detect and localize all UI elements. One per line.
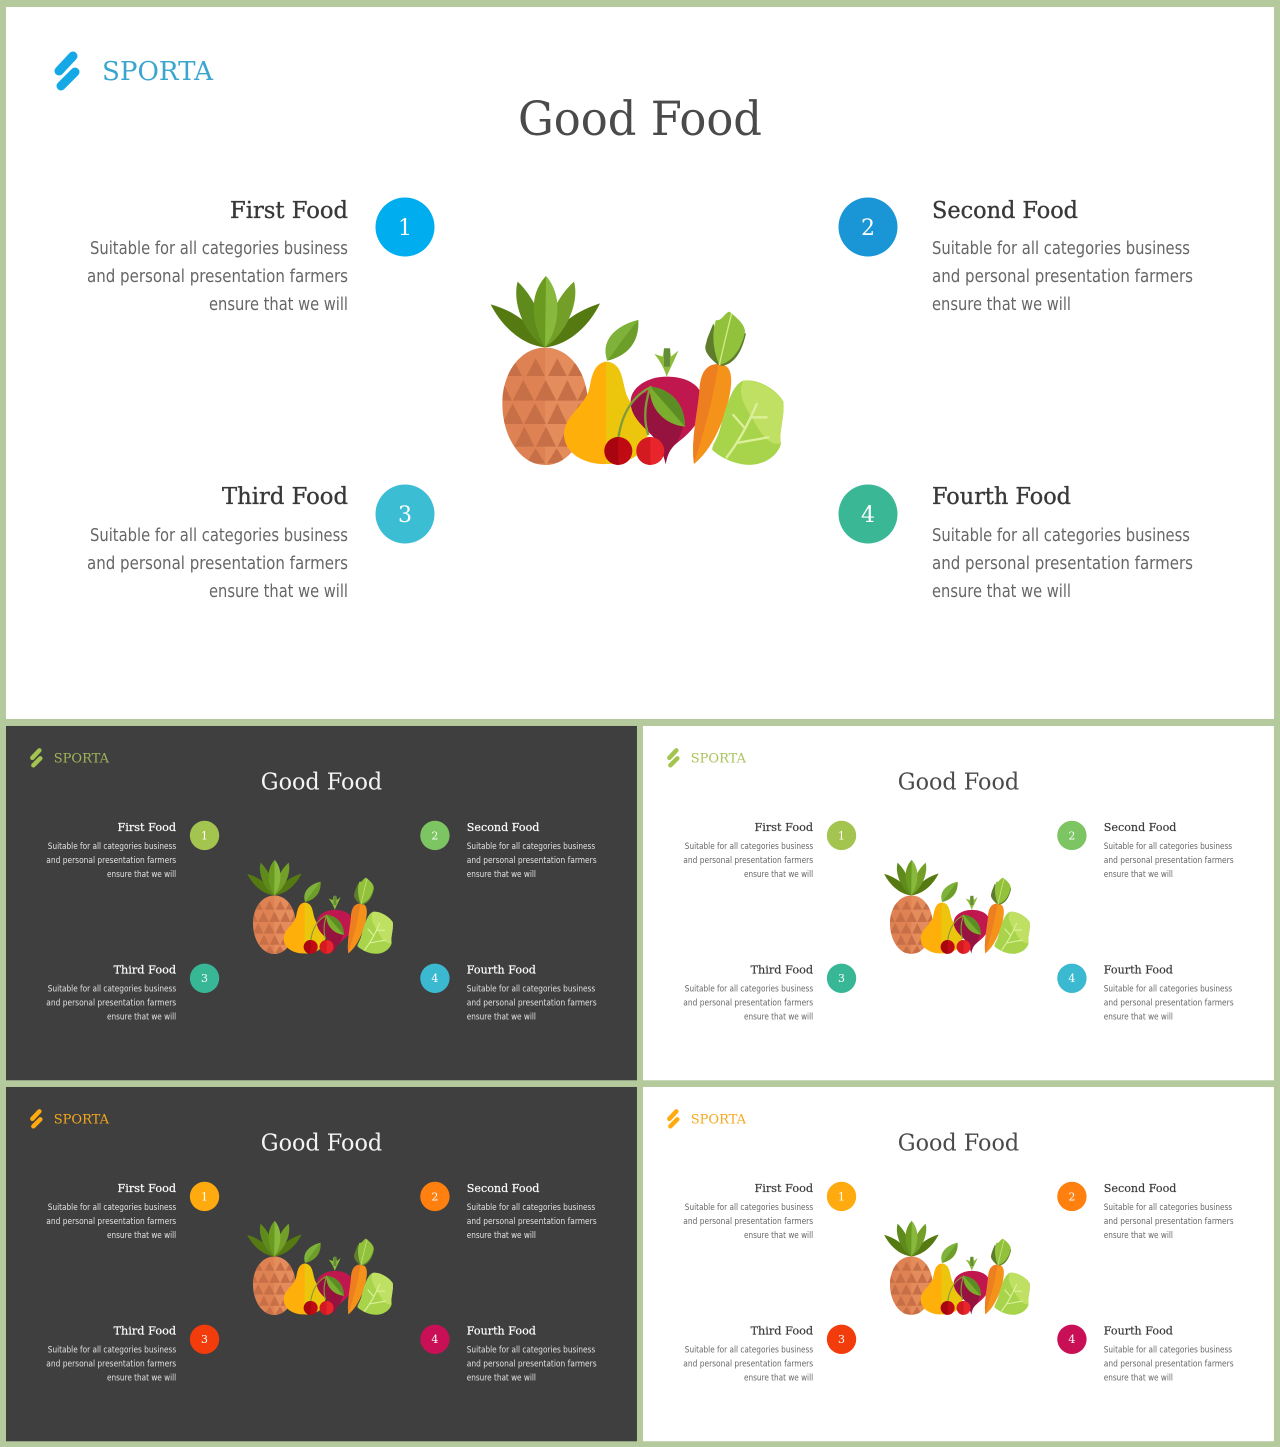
panel: dark slide, orange theme	[6, 1087, 637, 1441]
badge 2: 2	[861, 216, 875, 241]
logo: SPORTA	[669, 750, 747, 766]
text block: Second Food: and personal presentation farmers	[467, 1217, 597, 1227]
title: Good Food	[518, 92, 762, 147]
text block: Third Food: and personal presentation farmers	[46, 999, 177, 1009]
text block: Fourth Food: Fourth Food	[1104, 1323, 1173, 1337]
badge 2	[420, 821, 450, 850]
text block: Fourth Food	[932, 484, 1193, 602]
text block: Fourth Food	[1104, 962, 1234, 1023]
text block: First Food: and personal presentation farmers	[46, 1217, 177, 1227]
text block: Fourth Food: and personal presentation farmers	[932, 554, 1193, 574]
text block: Third Food: ensure that we will	[744, 1013, 813, 1023]
logo: SPORTA	[32, 750, 110, 766]
text block: Fourth Food: and personal presentation farmers	[1104, 999, 1234, 1009]
badge 1	[827, 1182, 856, 1211]
badge 4: 4	[861, 503, 875, 528]
text block: First Food	[87, 198, 348, 315]
text block: First Food: and personal presentation farmers	[683, 1217, 814, 1227]
logo: SPORTA	[669, 1111, 747, 1127]
text block: Second Food: Suitable for all categories business	[467, 842, 596, 852]
badge 3	[190, 1325, 219, 1354]
badge 1	[190, 1182, 219, 1211]
text block: Fourth Food	[1104, 1323, 1234, 1384]
logo: SPORTA	[32, 1111, 110, 1127]
text block: First Food: ensure that we will	[107, 870, 176, 880]
text block: Second Food: Second Food	[932, 198, 1078, 224]
badge 1	[376, 198, 434, 256]
text block: Fourth Food: ensure that we will	[467, 1374, 536, 1384]
text block: Fourth Food: ensure that we will	[1104, 1374, 1173, 1384]
text block: Third Food: ensure that we will	[107, 1013, 176, 1023]
badge 2	[420, 1182, 450, 1211]
text block: Fourth Food: Suitable for all categories business	[467, 985, 596, 995]
text block: Second Food	[467, 820, 597, 880]
badge 4	[838, 484, 898, 544]
text block: Fourth Food: Fourth Food	[467, 1323, 536, 1337]
text block: First Food	[683, 1181, 814, 1241]
badge 1	[190, 821, 219, 850]
text block: Second Food: Second Food	[467, 1181, 539, 1195]
text block: Fourth Food: Suitable for all categories business	[932, 526, 1190, 546]
badge 1: 1	[398, 216, 412, 241]
text block: Second Food	[1104, 820, 1234, 880]
text block: Third Food: Suitable for all categories business	[685, 985, 814, 995]
text block: First Food: and personal presentation farmers	[87, 267, 348, 287]
badge 2: 2	[1068, 1190, 1075, 1203]
text block: Fourth Food: ensure that we will	[467, 1013, 536, 1023]
text block: Fourth Food	[467, 1323, 597, 1384]
text block: Fourth Food: and personal presentation farmers	[467, 999, 597, 1009]
text block: Third Food: Suitable for all categories business	[48, 1346, 177, 1356]
logo: SPORTA: SPORTA	[691, 751, 747, 766]
text block: First Food	[46, 820, 177, 880]
badge 4	[420, 1325, 450, 1354]
text block: Second Food: Suitable for all categories business	[467, 1203, 596, 1213]
text block: Fourth Food: and personal presentation farmers	[1104, 1360, 1234, 1370]
text block: First Food	[46, 1181, 177, 1241]
text block: Third Food: Third Food	[113, 962, 176, 976]
text block: First Food: First Food	[117, 820, 176, 834]
text block: First Food: First Food	[230, 198, 348, 224]
text block: Second Food: and personal presentation farmers	[467, 856, 597, 866]
badge 3: 3	[201, 1333, 208, 1346]
badge 1	[827, 821, 856, 850]
badge 2: 2	[431, 1190, 438, 1203]
badge 4: 4	[431, 972, 438, 985]
text block: Fourth Food: ensure that we will	[932, 582, 1071, 602]
text block: Third Food: ensure that we will	[209, 582, 348, 602]
text block: Second Food: and personal presentation farmers	[932, 267, 1193, 287]
text block: First Food: ensure that we will	[209, 295, 348, 315]
text block: First Food: First Food	[754, 820, 813, 834]
text block: First Food: and personal presentation farmers	[46, 856, 177, 866]
text block: First Food: Suitable for all categories business	[48, 1203, 177, 1213]
badge 1: 1	[838, 829, 845, 842]
text block: Fourth Food: and personal presentation farmers	[467, 1360, 597, 1370]
illustration: fruit and vegetables	[884, 1221, 1030, 1315]
badge 4	[1057, 964, 1087, 993]
text block: Third Food: Suitable for all categories business	[685, 1346, 814, 1356]
logo: SPORTA: SPORTA	[691, 1112, 747, 1127]
text block: Second Food	[1104, 1181, 1234, 1241]
text block: Third Food: and personal presentation farmers	[683, 1360, 814, 1370]
text block: Fourth Food: Fourth Food	[1104, 962, 1173, 976]
text block: First Food	[683, 820, 814, 880]
text block: Third Food	[683, 962, 814, 1023]
text block: Third Food	[683, 1323, 814, 1384]
badge 4: 4	[1068, 1333, 1075, 1346]
text block: Fourth Food: Suitable for all categories business	[467, 1346, 596, 1356]
text block: First Food: Suitable for all categories business	[48, 842, 177, 852]
illustration: fruit and vegetables	[247, 860, 393, 954]
badge 2	[1057, 821, 1087, 850]
text block: Second Food: Second Food	[1104, 1181, 1176, 1195]
badge 3	[827, 964, 856, 993]
logo: SPORTA: SPORTA	[54, 1112, 110, 1127]
text block: Third Food	[46, 1323, 177, 1384]
logo: SPORTA: SPORTA	[54, 751, 110, 766]
text block: Third Food: and personal presentation farmers	[46, 1360, 177, 1370]
text block: Third Food: Third Food	[113, 1323, 176, 1337]
text block: Second Food: Suitable for all categories business	[932, 239, 1190, 259]
title: Good Food	[261, 768, 382, 796]
text block: Third Food: Third Food	[750, 962, 813, 976]
text block: Second Food: ensure that we will	[467, 1231, 536, 1241]
text block: First Food: Suitable for all categories business	[90, 239, 348, 259]
badge 3: 3	[398, 503, 412, 528]
badge 1: 1	[201, 1190, 208, 1203]
text block: Second Food	[467, 1181, 597, 1241]
text block: Second Food: and personal presentation farmers	[1104, 856, 1234, 866]
text block: Third Food: ensure that we will	[107, 1374, 176, 1384]
badge 2: 2	[431, 829, 438, 842]
text block: Fourth Food: Fourth Food	[932, 484, 1071, 510]
text block: Second Food: ensure that we will	[1104, 1231, 1173, 1241]
logo: SPORTA: SPORTA	[102, 57, 214, 87]
text block: Fourth Food: Suitable for all categories business	[1104, 985, 1233, 995]
panel: large white slide	[6, 7, 1274, 719]
text block: Fourth Food	[467, 962, 597, 1023]
badge 3: 3	[838, 1333, 845, 1346]
badge 4: 4	[431, 1333, 438, 1346]
badge 3	[827, 1325, 856, 1354]
text block: Second Food: Suitable for all categories business	[1104, 1203, 1233, 1213]
text block: Second Food	[932, 198, 1193, 315]
title: Good Food	[898, 768, 1019, 796]
badge 3	[376, 484, 434, 544]
panel: white slide, green theme	[643, 726, 1274, 1080]
text block: First Food: Suitable for all categories business	[685, 842, 814, 852]
text block: First Food: ensure that we will	[107, 1231, 176, 1241]
logo: SPORTA	[59, 56, 214, 87]
text block: First Food: ensure that we will	[744, 1231, 813, 1241]
text block: Third Food: and personal presentation farmers	[87, 554, 348, 574]
text block: Third Food	[46, 962, 177, 1023]
text block: First Food: Suitable for all categories business	[685, 1203, 814, 1213]
text block: Second Food: ensure that we will	[932, 295, 1071, 315]
text block: Second Food: Second Food	[467, 820, 539, 834]
illustration: fruit and vegetables	[247, 1221, 393, 1315]
illustration: fruit and vegetables	[491, 276, 784, 465]
badge 3: 3	[201, 972, 208, 985]
text block: Third Food: ensure that we will	[744, 1374, 813, 1384]
badge 4	[1057, 1325, 1087, 1354]
panel: dark slide, green theme	[6, 726, 637, 1080]
title: Good Food	[261, 1129, 382, 1157]
badge 4	[420, 964, 450, 993]
badge 2	[1057, 1182, 1087, 1211]
text block: Second Food: Suitable for all categories business	[1104, 842, 1233, 852]
text block: Third Food: Suitable for all categories business	[90, 526, 348, 546]
badge 3	[190, 964, 219, 993]
text block: Fourth Food: Suitable for all categories business	[1104, 1346, 1233, 1356]
text block: Second Food: ensure that we will	[1104, 870, 1173, 880]
badge 2: 2	[1068, 829, 1075, 842]
text block: Third Food: and personal presentation farmers	[683, 999, 814, 1009]
text block: Second Food: and personal presentation farmers	[1104, 1217, 1234, 1227]
badge 1: 1	[201, 829, 208, 842]
title: Good Food	[898, 1129, 1019, 1157]
text block: First Food: First Food	[117, 1181, 176, 1195]
text block: Third Food	[87, 484, 348, 602]
text block: Fourth Food: Fourth Food	[467, 962, 536, 976]
text block: First Food: First Food	[754, 1181, 813, 1195]
text block: Second Food: Second Food	[1104, 820, 1176, 834]
badge 3: 3	[838, 972, 845, 985]
text block: Third Food: Suitable for all categories business	[48, 985, 177, 995]
illustration: fruit and vegetables	[884, 860, 1030, 954]
panel: white slide, orange theme	[643, 1087, 1274, 1441]
text block: Fourth Food: ensure that we will	[1104, 1013, 1173, 1023]
badge 2	[838, 198, 898, 256]
text block: Third Food: Third Food	[222, 484, 348, 510]
text block: Third Food: Third Food	[750, 1323, 813, 1337]
text block: Second Food: ensure that we will	[467, 870, 536, 880]
text block: First Food: ensure that we will	[744, 870, 813, 880]
text block: First Food: and personal presentation farmers	[683, 856, 814, 866]
badge 1: 1	[838, 1190, 845, 1203]
badge 4: 4	[1068, 972, 1075, 985]
